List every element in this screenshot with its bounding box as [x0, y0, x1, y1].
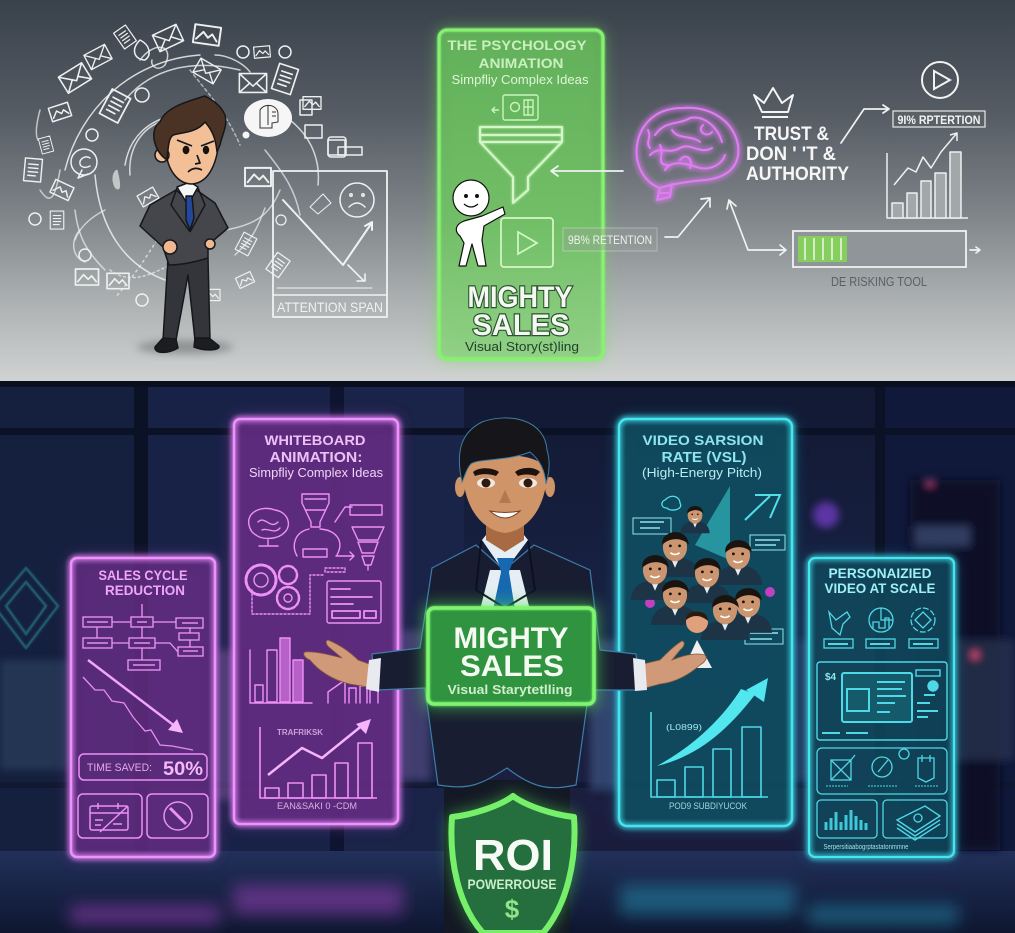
declining attention line	[283, 200, 372, 265]
time saved stat	[79, 754, 207, 780]
connector arrows	[551, 105, 980, 255]
neck and head	[486, 510, 524, 552]
stick figure mascot	[453, 180, 505, 266]
crowd of testimonial faces	[631, 486, 785, 668]
trousers	[444, 780, 570, 933]
icon: crown	[754, 88, 793, 117]
head	[166, 120, 219, 184]
growth chart: POD9 SUBDIYUCOK	[669, 801, 747, 811]
shirt and tie	[480, 530, 530, 610]
heading	[448, 37, 587, 71]
icon: cycle arrows	[294, 507, 354, 560]
floor reflections	[70, 885, 958, 925]
left hand	[304, 640, 372, 687]
icon: documents	[23, 25, 298, 278]
heading: VIDEO SARSION	[642, 432, 764, 448]
icon: funnel	[480, 127, 562, 203]
icon: play circle	[922, 62, 958, 98]
face features	[183, 146, 209, 154]
icon: tall funnel stack	[352, 527, 384, 570]
icon: envelopes	[58, 24, 267, 93]
brand tagline: Visual Starytetlling	[448, 682, 573, 697]
icon: dollar sign: $	[505, 894, 520, 924]
heading: ANIMATION:	[270, 449, 362, 466]
subheading: (High-Energy Pitch)	[642, 465, 762, 480]
trust and authority text	[746, 124, 849, 185]
icon row with labels	[824, 608, 938, 648]
video dashboard frame	[817, 662, 947, 740]
face features	[473, 468, 540, 518]
heading	[642, 432, 764, 466]
icon trio box	[817, 748, 947, 794]
panel: psychology animation (green)	[438, 29, 604, 360]
brand tagline: Visual Story(st)ling	[465, 339, 579, 354]
trust and authority text: DON ' 'T &	[746, 144, 836, 165]
shirt and tie	[177, 182, 198, 205]
mighty sales neon box	[424, 604, 598, 708]
icon: play video frame	[501, 218, 553, 267]
panel: whiteboard animation (purple)	[233, 418, 399, 825]
icon: gears	[246, 565, 276, 595]
brand wordmark: MIGHTY	[454, 622, 568, 655]
heading: VIDEO AT SCALE	[824, 580, 936, 596]
heading	[98, 567, 188, 598]
heading: SALES CYCLE	[98, 567, 188, 583]
growth chart	[260, 719, 377, 811]
attention span label: ATTENTION SPAN	[277, 299, 383, 315]
heading	[264, 432, 366, 466]
shoes	[155, 338, 219, 352]
hair	[154, 96, 226, 160]
growth chart: EAN&SAKI 0 -CDM	[277, 801, 357, 811]
brand wordmark: SALES	[460, 650, 564, 683]
growth chart: TRAFRIKSK	[277, 728, 323, 737]
retention label box: 9B% RETENTION	[568, 233, 652, 247]
icon: document panel	[327, 581, 381, 623]
thought bubble with head icon	[242, 99, 292, 138]
icon: sad face	[340, 183, 374, 217]
heading: THE PSYCHOLOGY	[448, 37, 587, 53]
icon: no entry	[147, 794, 208, 838]
panel: personalized video at scale (cyan)	[808, 557, 955, 858]
progress label: DE RISKING TOOL	[831, 274, 927, 289]
brand wordmark: MIGHTY	[468, 281, 572, 314]
fine print: Serpersitiaabogrptastatonmmne	[824, 844, 909, 851]
icon: top funnel	[302, 494, 329, 527]
ROI powerhouse shield	[448, 792, 578, 933]
right hand	[643, 641, 706, 688]
time saved stat: 50%	[163, 759, 203, 780]
retention label box	[563, 228, 657, 251]
growth chart	[651, 678, 768, 811]
frustrated businessman cartoon	[137, 96, 233, 354]
subheading: Simpfliy Complex Ideas	[249, 465, 383, 480]
doodle swirl of distractions	[23, 24, 362, 306]
brand wordmark	[454, 622, 568, 683]
icon: teal diamond on distant building	[0, 568, 58, 648]
video dashboard frame: $4	[825, 672, 837, 683]
heading: RATE (VSL)	[662, 449, 746, 466]
heading: ANIMATION	[478, 55, 564, 71]
brand wordmark	[468, 281, 572, 342]
icon: calendar	[78, 794, 142, 838]
growth chart: (L0899)	[666, 723, 702, 732]
heading	[824, 565, 936, 596]
icon: photos and cards	[48, 24, 321, 301]
powerhouse label: POWERROUSE	[468, 876, 556, 892]
heading: REDUCTION	[105, 582, 185, 598]
ROI text: ROI	[473, 831, 553, 880]
subheading: Simpfliy Complex Ideas	[452, 72, 589, 87]
top section background	[0, 0, 1015, 381]
jagged decline line	[83, 677, 193, 750]
icon: small video card	[492, 95, 538, 120]
progress bar: de-risking tool	[793, 231, 966, 289]
bar chart: retention growth	[887, 133, 968, 218]
attention span chart panel	[273, 171, 387, 317]
flow diagram	[83, 604, 203, 670]
trust and authority text: AUTHORITY	[746, 164, 849, 185]
panel: sales cycle reduction (purple)	[70, 557, 216, 858]
time saved stat: TIME SAVED:	[87, 762, 152, 774]
icon: bar chart	[250, 650, 312, 703]
presenter in navy suit	[304, 418, 706, 933]
suit jacket and arms	[372, 545, 640, 788]
whiteboard icons	[246, 494, 384, 703]
big downward arrow	[88, 660, 183, 733]
trousers	[163, 258, 210, 340]
jacket	[140, 189, 228, 265]
heading: PERSONAIZIED	[828, 565, 932, 581]
bars and cash icons	[817, 800, 947, 840]
bottom section background	[0, 381, 1015, 933]
panel: video conversion rate (cyan)	[618, 418, 793, 827]
city skyline bokeh	[0, 480, 1015, 850]
brand wordmark: SALES	[472, 309, 570, 342]
icon: circles and badges	[29, 40, 362, 306]
trust and authority text: TRUST &	[754, 124, 829, 145]
icon: brain on stand	[249, 508, 288, 546]
retention label top right: 9I% RPTERTION	[898, 113, 980, 127]
heading: WHITEBOARD	[264, 432, 366, 448]
icon: neon brain	[637, 108, 738, 200]
hair	[459, 418, 549, 484]
